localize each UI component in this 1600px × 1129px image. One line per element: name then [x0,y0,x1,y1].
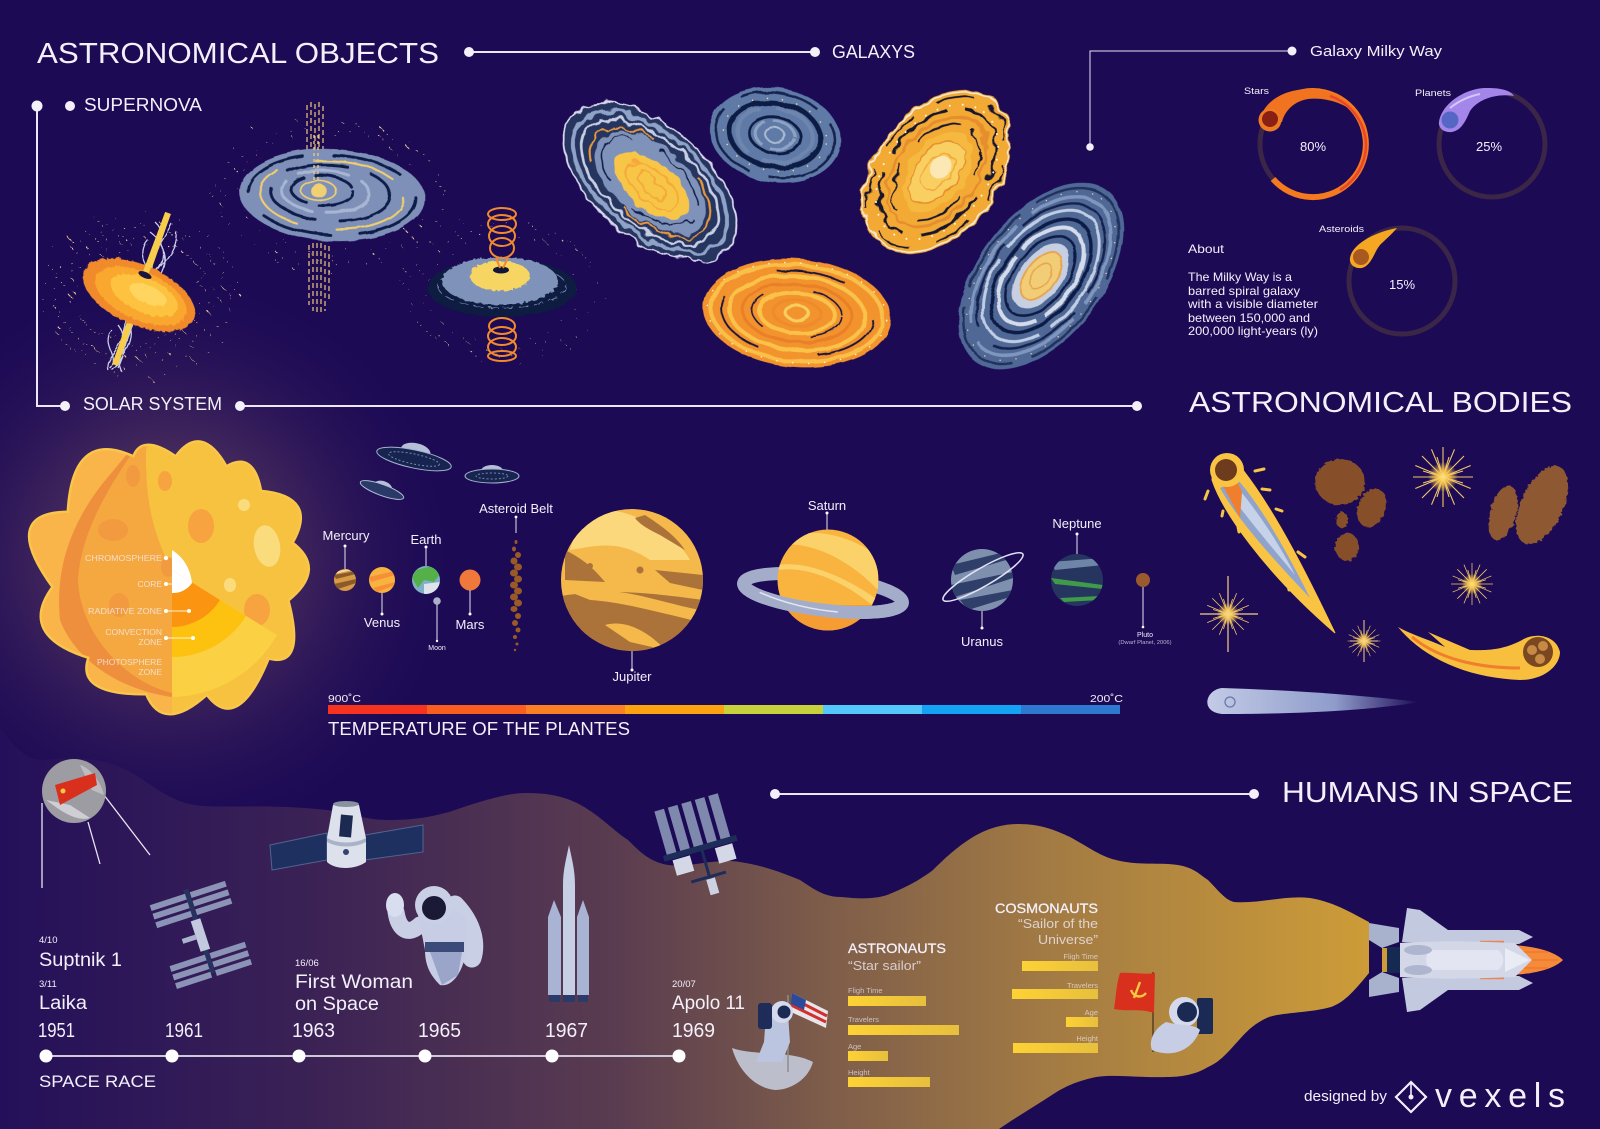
event: suptnik 1: 4/10 [39,935,58,946]
sun layer labels: ZONE [138,667,162,677]
planet: pluto [1118,573,1172,646]
donut: planets 25%: Planets [1415,88,1451,99]
bar chart: astronauts: Fligh Time [848,986,883,995]
sun layer labels: CHROMOSPHERE [85,553,162,563]
heading: space race: SPACE RACE [39,1072,156,1091]
event: laika: Laika [39,993,87,1014]
event: laika [39,979,87,1014]
supernova: blue disc [220,102,444,313]
text block: about: About [1188,242,1225,256]
donut: asteroids 15% [1319,224,1455,334]
planet: pluto: Pluto [1137,632,1153,639]
timeline: space race [38,1020,715,1062]
event: suptnik 1: Suptnik 1 [39,950,122,971]
moon [428,597,446,652]
timeline: space race: 1967 [545,1020,588,1042]
rocket [548,845,589,1002]
ufo: large [375,435,454,476]
galaxy: small blue spiral [702,77,848,193]
sun cross-section [28,440,310,716]
text block: about [1187,242,1318,338]
sun layer labels: RADIATIVE ZONE [88,606,162,616]
timeline: space race: 1969 [672,1020,715,1042]
planet: saturn: Saturn [808,498,846,513]
bar chart: cosmonauts [1012,952,1099,1053]
event: first woman on space: on Space [295,994,379,1015]
event: first woman on space: 16/06 [295,958,319,969]
sun layer labels [85,553,195,677]
text block: about: between 150,000 and [1188,311,1310,325]
connector: supernova to solar system [32,100,75,411]
text block: astronauts: ASTRONAUTS [848,940,946,956]
text block: cosmonauts: Universe” [1038,932,1098,947]
rocket exhaust flame background [0,728,1369,1129]
temperature bar: 900˚C [328,693,361,705]
planet: venus [364,567,401,630]
donut: stars 80%: 80% [1300,139,1326,154]
planet: venus: Venus [364,615,401,630]
planet: mars: Mars [456,617,485,632]
bar chart: astronauts [848,986,959,1087]
sputnik [42,759,150,888]
asteroids: elongated rocks [1483,458,1579,552]
text block: about: barred spiral galaxy [1188,284,1300,298]
connector: humans in space [770,789,1259,799]
planet: neptune [1051,516,1103,606]
bar chart: cosmonauts: Age [1085,1008,1098,1017]
ufo: right [465,465,519,483]
galaxy: wavy blue with yellow core [535,73,765,291]
heading: solar system: SOLAR SYSTEM [83,394,222,414]
space station: small [149,877,252,989]
donut: planets 25%: 25% [1476,139,1502,154]
galaxy: large blue spiral [926,153,1156,399]
heading: supernova: SUPERNOVA [84,95,202,115]
satellite capsule [270,801,423,870]
planet: saturn [742,498,904,632]
text block: cosmonauts: “Sailor of the [1018,916,1098,931]
title: astronomical bodies: ASTRONOMICAL BODIES [1189,387,1572,419]
comet: pale blue [1207,688,1420,714]
heading: humans in space: HUMANS IN SPACE [1282,777,1573,809]
bar chart: astronauts: Age [848,1042,861,1051]
temperature bar [328,693,1123,714]
timeline: space race: 1951 [38,1020,75,1042]
sun layer labels: PHOTOSPHERE [97,657,162,667]
event: apolo 11: Apolo 11 [672,993,745,1014]
designed by credit: designed by [1304,1088,1388,1105]
planet: jupiter: Jupiter [612,669,652,684]
text block: cosmonauts: COSMONAUTS [995,900,1098,916]
planet: neptune: Neptune [1052,516,1102,531]
galaxy: orange spiral [699,251,895,375]
text block: about: with a visible diameter [1187,297,1318,311]
supernova: orange disc [42,213,238,372]
event: first woman on space [295,958,413,1015]
bar chart: cosmonauts: Fligh Time [1063,952,1098,961]
star: middle right [1451,563,1493,605]
planet: pluto: (Dwarf Planet, 2006) [1118,640,1172,646]
planet: earth [410,532,442,594]
planet: jupiter [561,509,703,684]
heading: galaxy milky way: Galaxy Milky Way [1310,43,1443,60]
bar chart: astronauts: Height [848,1068,871,1077]
space station: large [651,792,750,905]
comet: orange [1398,627,1560,680]
bar chart: cosmonauts: Height [1076,1034,1099,1043]
planet: earth: Earth [410,532,442,547]
planet: mars [456,570,485,632]
asteroid belt [479,501,553,651]
cosmonaut with soviet flag [1114,972,1213,1053]
donut: stars 80%: Stars [1244,86,1269,97]
star: small [1348,620,1380,662]
timeline: space race: 1963 [292,1020,335,1042]
connector: objects to galaxys [464,47,820,57]
timeline: space race: 1965 [418,1020,461,1042]
asteroids: rock cluster [1315,459,1392,561]
text block: cosmonauts [995,900,1098,947]
astronaut on moon with usa flag [732,993,828,1090]
event: laika: 3/11 [39,979,57,990]
donut: asteroids 15%: Asteroids [1319,224,1364,235]
asteroid belt: Asteroid Belt [479,501,553,516]
sun layer labels: CORE [137,579,162,589]
space shuttle [1369,908,1563,1012]
supernova: ringed disc [407,208,597,361]
astronaut: floating [386,886,474,985]
donut: asteroids 15%: 15% [1389,277,1415,292]
star: left four-point [1200,576,1258,652]
event: apolo 11: 20/07 [672,979,696,990]
temperature bar: 200˚C [1090,693,1123,705]
comet: golden with blue core [1205,453,1335,633]
text block: astronauts [848,940,946,973]
title: astronomical objects: ASTRONOMICAL OBJECTS [37,38,439,70]
heading: temperature of the plantes: TEMPERATURE OF THE PLANTES [328,719,630,739]
event: apolo 11 [672,979,745,1014]
sun glow [0,260,470,860]
heading: galaxys: GALAXYS [832,42,915,62]
bar chart: astronauts: Travelers [848,1015,879,1024]
planet: mercury: Mercury [323,528,370,543]
planet: uranus [942,549,1024,646]
sun layers wedge [172,550,277,697]
galaxy: golden wavy [832,61,1042,283]
ufo: small [359,474,407,503]
sun layer labels: CONVECTION [105,627,162,637]
donut: planets 25% [1415,88,1545,197]
bar chart: cosmonauts: Travelers [1067,981,1098,990]
event: first woman on space: First Woman [295,972,413,993]
connector: galaxy milky way [1086,46,1296,151]
donut: stars 80% [1244,86,1366,197]
sun layer labels: ZONE [138,637,162,647]
moon: Moon [428,645,446,652]
planet: uranus: Uranus [961,634,1003,649]
timeline: space race: 1961 [165,1020,203,1042]
text block: astronauts: “Star sailor” [848,958,921,973]
text block: about: 200,000 light-years (ly) [1188,324,1318,338]
event: suptnik 1 [39,935,122,971]
star burst: top [1413,447,1473,507]
connector: solar system line [235,401,1142,411]
planet: mercury [323,528,370,591]
logo: vexels: vexels [1435,1077,1565,1115]
text block: about: The Milky Way is a [1188,270,1292,284]
